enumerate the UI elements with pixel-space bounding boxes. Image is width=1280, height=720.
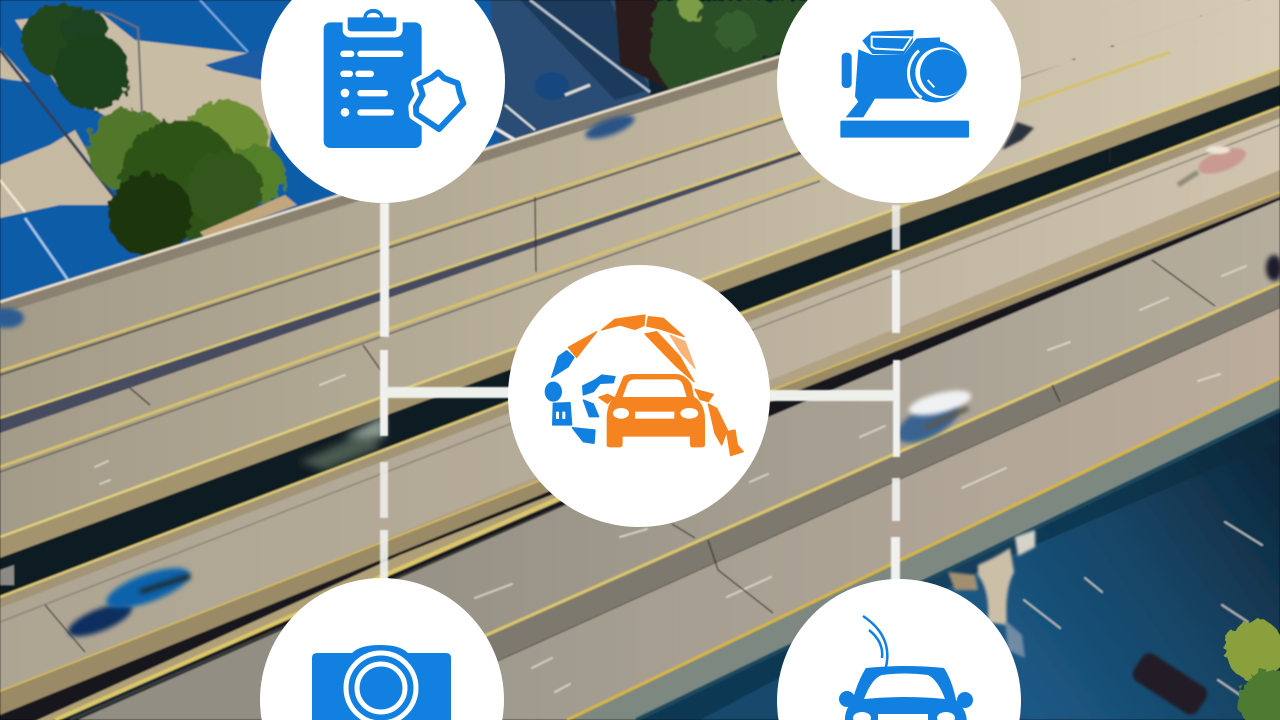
node: bottom-right car: [777, 579, 1021, 720]
orange car: [607, 374, 705, 447]
bridge pier: [948, 530, 1035, 658]
lamp pole: top-left: [95, 12, 142, 115]
node: bottom-left camera: [260, 578, 504, 720]
node: centre car incident: [508, 265, 770, 527]
icon: car under orange and blue arc: [545, 315, 743, 456]
connector: right horizontal: [768, 390, 897, 401]
underpass road: [636, 410, 1280, 720]
dark gap under deck: [0, 85, 1280, 597]
icon: photo camera: [312, 645, 451, 720]
expansion joint cracks: [45, 150, 1215, 652]
car: blue at left edge: [0, 308, 24, 328]
trees: top-centre: [650, 0, 810, 92]
car: dark beside camera circle: [1002, 122, 1034, 150]
node: top-left report: [261, 0, 505, 203]
dark median strip: [0, 65, 1060, 433]
deck 4: fourth carriageway: [0, 13, 1280, 537]
connectors: white link lines: [380, 203, 900, 582]
deck 2: second carriageway: [0, 0, 1280, 418]
connector: left horizontal: [384, 387, 512, 398]
node: top-right dash camera: [777, 0, 1021, 203]
lane dashes: [95, 266, 1262, 695]
deck 1: upper carriageway: [0, 0, 1280, 371]
ground: top-left blue road and sidewalk: [0, 0, 640, 305]
concrete below middle carriageway: [0, 193, 1280, 715]
deck 3: third carriageway: [0, 0, 1280, 467]
concrete under edge: [567, 378, 1280, 720]
car: white and blue blurred: [891, 386, 973, 451]
icon: camera on base: [840, 30, 969, 138]
deck 6: lower carriageway: [78, 200, 1280, 720]
connector: right vertical: [891, 205, 900, 582]
car: blue on lower-left deck: [64, 560, 194, 643]
top-right beige deck: [960, 0, 1280, 150]
icon: car with smoke wisps: [839, 616, 973, 720]
car: dark on underpass: [1129, 650, 1211, 718]
concrete side wall: [0, 68, 1280, 558]
orange arc pieces: [568, 315, 743, 456]
car: blurred on top deck: [583, 111, 637, 143]
car: dark blur on right edge: [1266, 255, 1280, 281]
tree: bottom right: [1225, 620, 1280, 720]
trees: top-left: [22, 2, 285, 257]
concrete divider: [295, 283, 1280, 720]
icon: clipboard with shield: [324, 9, 466, 148]
car: pink: [1178, 143, 1249, 185]
connector: left vertical: [380, 203, 389, 580]
ground: top-centre dark road: [490, 0, 680, 150]
blue arc pieces: [545, 351, 615, 443]
deck 7: bottom carriageway: [368, 308, 1280, 720]
